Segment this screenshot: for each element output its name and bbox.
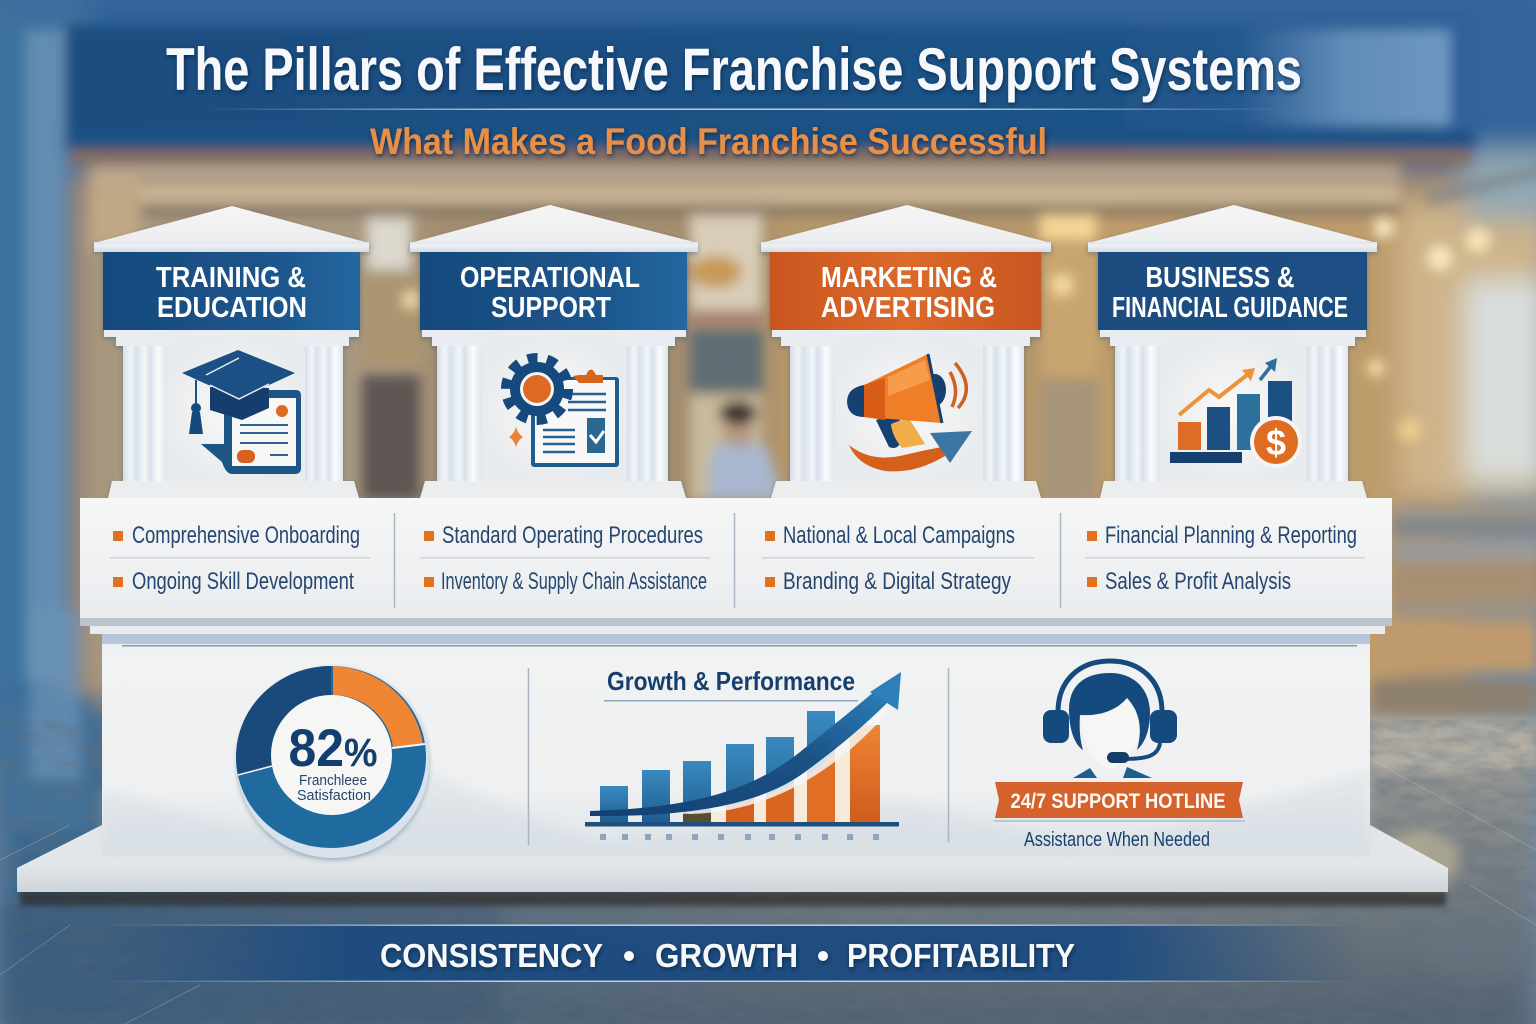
footer band bbox=[100, 924, 1360, 982]
hotline caption: Assistance When Needed bbox=[1024, 829, 1210, 851]
donut chart: 82% franchisee satisfaction: Satisfaction bbox=[297, 787, 371, 804]
icon: finance chart and dollar coin bbox=[1170, 358, 1302, 468]
banner: business and financial guidance: FINANCIAL GUIDANCE bbox=[1112, 292, 1348, 324]
growth and performance chart bbox=[585, 666, 901, 840]
pillar 4: business and financial guidance bbox=[1088, 205, 1377, 498]
columns bbox=[771, 330, 1041, 498]
pillar 2: operational support bbox=[410, 205, 698, 498]
pillar 3: marketing and advertising bbox=[761, 205, 1051, 498]
icon: megaphone bbox=[847, 354, 972, 471]
icon: gear and clipboard bbox=[506, 358, 619, 467]
banner: training and education: EDUCATION bbox=[157, 292, 307, 324]
roof bbox=[761, 205, 1051, 252]
list: business and financial guidance bbox=[1085, 522, 1365, 595]
axis ticks bbox=[600, 834, 879, 840]
banner: marketing and advertising: MARKETING & bbox=[821, 262, 997, 294]
banner: training and education: TRAINING & bbox=[156, 262, 306, 294]
roof bbox=[410, 205, 698, 252]
banner: marketing and advertising bbox=[770, 252, 1041, 330]
banner: operational support bbox=[420, 252, 687, 330]
banner: business and financial guidance: BUSINESS & bbox=[1146, 262, 1295, 294]
banner: operational support: SUPPORT bbox=[491, 292, 611, 324]
list: marketing and advertising bbox=[762, 522, 1034, 595]
subtitle: What Makes a Food Franchise Successful bbox=[370, 121, 1047, 162]
banner: business and financial guidance bbox=[1098, 252, 1367, 330]
lower plinth panel bbox=[102, 632, 1370, 856]
list: marketing and advertising: Branding & Digital Strategy bbox=[783, 568, 1011, 595]
list: training and education: Ongoing Skill Development bbox=[132, 568, 354, 595]
footer slogan bbox=[380, 937, 1075, 974]
roof bbox=[94, 206, 369, 252]
footer slogan: CONSISTENCY bbox=[380, 937, 603, 974]
list: business and financial guidance: Sales & Profit Analysis bbox=[1105, 568, 1291, 595]
list: operational support: Inventory & Supply Chain Assistance bbox=[441, 568, 707, 595]
satisfaction label: Franchleee bbox=[299, 772, 367, 789]
hotline ribbon: 24/7 SUPPORT HOTLINE bbox=[1010, 790, 1226, 813]
icon: graduation cap and certificate bbox=[182, 350, 301, 474]
stone platform bbox=[17, 825, 1448, 906]
footer slogan: PROFITABILITY bbox=[847, 937, 1075, 974]
list: training and education bbox=[110, 522, 370, 595]
icon: finance chart and dollar coin: $ bbox=[1266, 422, 1286, 463]
banner: operational support: OPERATIONAL bbox=[460, 262, 640, 294]
list: operational support bbox=[420, 522, 710, 595]
satisfaction value: 82% bbox=[288, 719, 378, 778]
title rule bbox=[200, 108, 1290, 110]
list: operational support: Standard Operating Procedures bbox=[442, 522, 703, 549]
columns bbox=[104, 330, 359, 498]
columns bbox=[1100, 330, 1367, 498]
list: business and financial guidance: Financial Planning & Reporting bbox=[1105, 522, 1357, 549]
hotline ribbon bbox=[994, 782, 1245, 822]
pillar 1: training and education bbox=[94, 206, 369, 498]
growth arrow bbox=[590, 672, 901, 816]
list: marketing and advertising: National & Local Campaigns bbox=[783, 522, 1015, 549]
banner: training and education bbox=[103, 252, 360, 330]
icon: support agent with headset bbox=[1043, 661, 1177, 778]
donut chart: 82% franchisee satisfaction bbox=[236, 666, 429, 858]
footer slogan: GROWTH bbox=[655, 937, 798, 974]
list: training and education: Comprehensive Onboarding bbox=[132, 522, 360, 549]
bars bbox=[600, 711, 880, 823]
chart heading: Growth & Performance bbox=[607, 666, 855, 696]
columns bbox=[420, 330, 686, 498]
roof bbox=[1088, 205, 1377, 252]
banner: marketing and advertising: ADVERTISING bbox=[821, 292, 995, 324]
feature list panel bbox=[80, 498, 1392, 634]
